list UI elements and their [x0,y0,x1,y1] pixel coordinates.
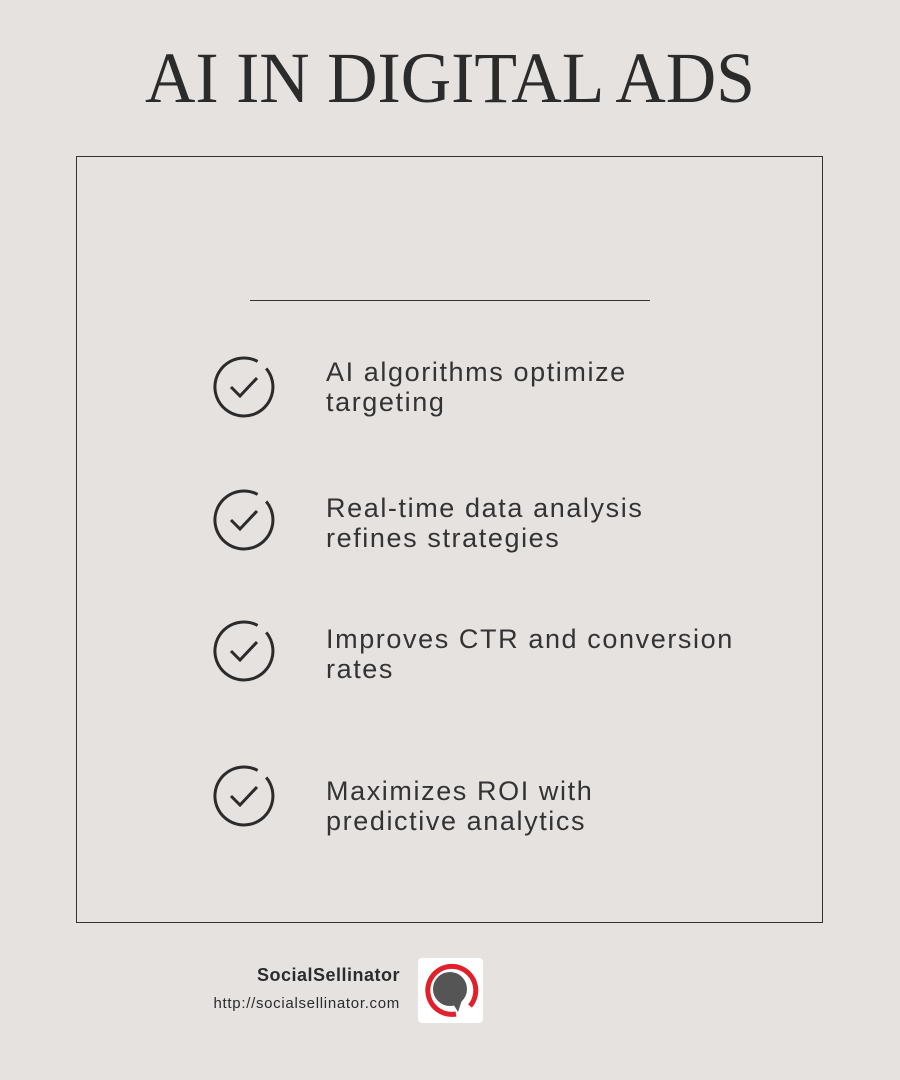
item 3: Improves CTR and conversion [326,624,734,654]
icon: check circle [213,766,274,826]
icon: check circle [213,356,274,418]
item 2: refines strategies [326,523,560,553]
icon: check circle [213,490,274,550]
item 4 [213,766,593,836]
title: AI IN DIGITAL ADS [145,38,755,118]
item 2: Real-time data analysis [326,493,643,523]
item 3 [213,620,734,684]
icon: check circle [213,620,274,682]
item 3: rates [326,654,394,684]
item 4: Maximizes ROI with [326,776,593,806]
icon: logo [418,958,483,1023]
item 1 [213,356,627,418]
item 1: AI algorithms optimize [326,357,627,387]
item 2 [213,490,643,553]
panel: benefits [76,156,823,923]
footer brand text: http://socialsellinator.com [214,995,400,1012]
footer brand text: SocialSellinator [257,965,400,985]
item 1: targeting [326,387,445,417]
item 4: predictive analytics [326,806,586,836]
footer brand text [214,965,400,1012]
